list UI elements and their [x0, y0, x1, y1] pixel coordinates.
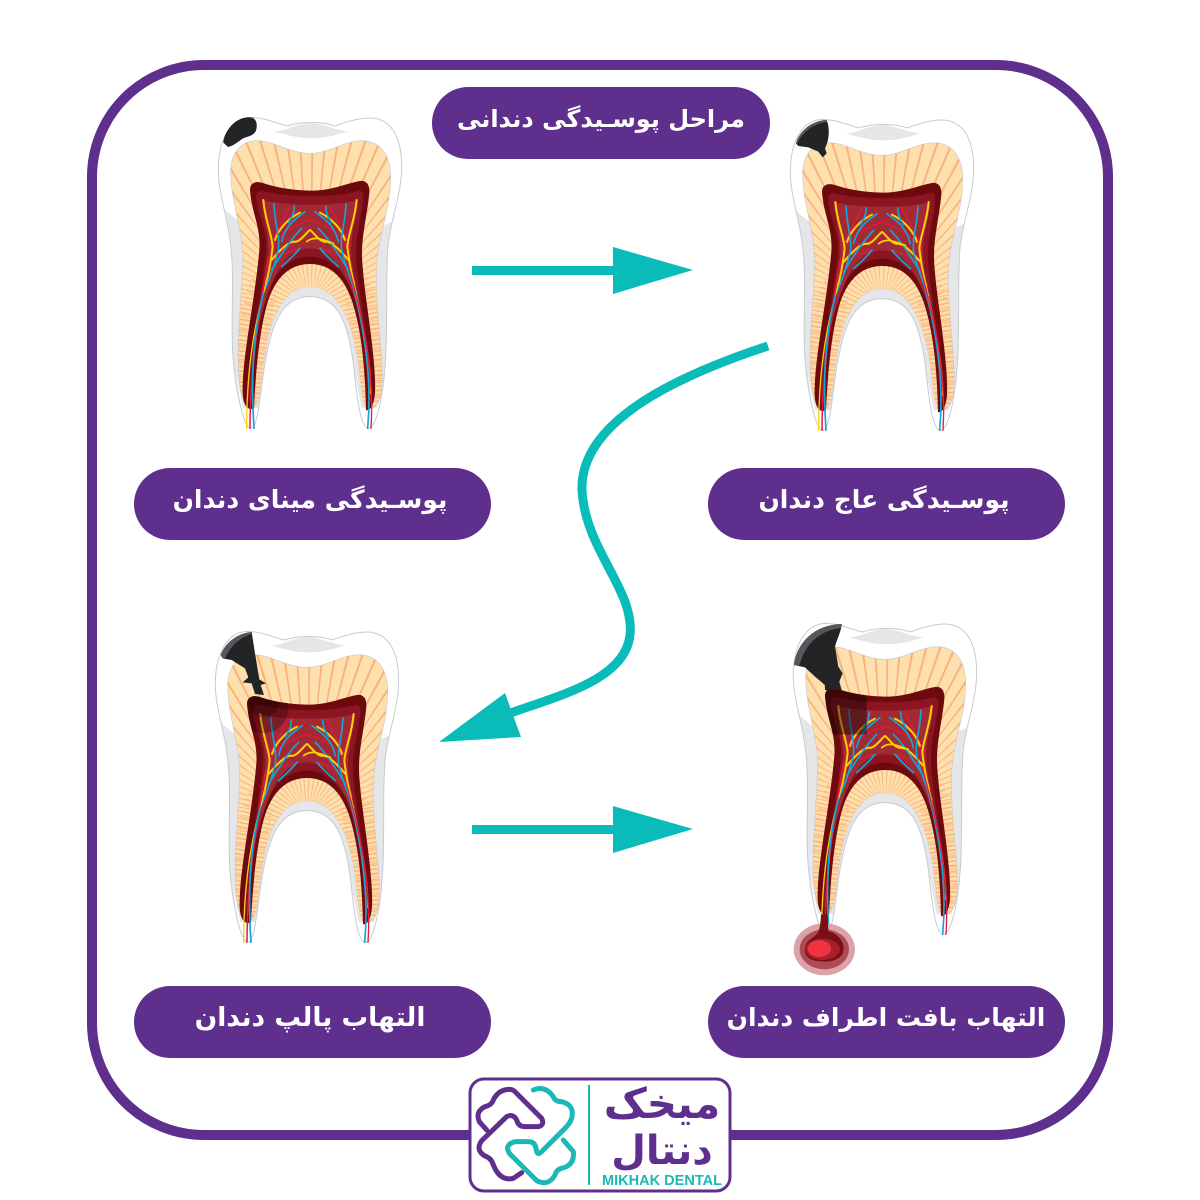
arrow: top horizontal: [472, 247, 693, 294]
arrow: bottom horizontal: [472, 806, 693, 853]
title: [432, 87, 770, 159]
logo: [470, 1079, 730, 1191]
arrow: curved: [439, 346, 768, 742]
label: pulpitis: [134, 986, 491, 1058]
logo latin name: MIKHAK DENTAL: [602, 1173, 722, 1189]
icon: abscess: [794, 914, 855, 975]
tooth: periapical inflammation: [785, 623, 985, 975]
icon: logo mark: [478, 1088, 574, 1183]
label: enamel decay: [134, 468, 491, 540]
label: dentin decay: [708, 468, 1065, 540]
pulp darkening: [825, 690, 867, 734]
divider: [588, 1085, 590, 1185]
label: enamel decay: پوسـیدگی مینای دندان: [173, 485, 447, 515]
tooth: pulp inflammation: [207, 631, 407, 947]
label: periapical inflammation: [708, 986, 1065, 1058]
icon: deep cavity: [221, 632, 266, 695]
logo wordmark: میخک: [604, 1079, 720, 1128]
tooth: enamel decay: [210, 117, 410, 433]
icon: large cavity: [794, 624, 843, 690]
tooth: dentin decay: [782, 119, 982, 435]
logo: دنتال: [611, 1128, 713, 1174]
label: dentin decay: پوسـیدگی عاج دندان: [758, 485, 1010, 515]
icon: enamel cavity: [223, 117, 257, 147]
icon: dentin cavity: [796, 120, 829, 157]
label: pulpitis: التهاب پالپ دندان: [195, 1002, 425, 1033]
title: مراحل پوسـیدگی دندانی: [457, 105, 745, 133]
outer frame: [92, 65, 1108, 1135]
pulp darkening: [247, 696, 288, 734]
label: periapical inflammation: التهاب بافت اطراف دندان: [727, 1003, 1045, 1033]
